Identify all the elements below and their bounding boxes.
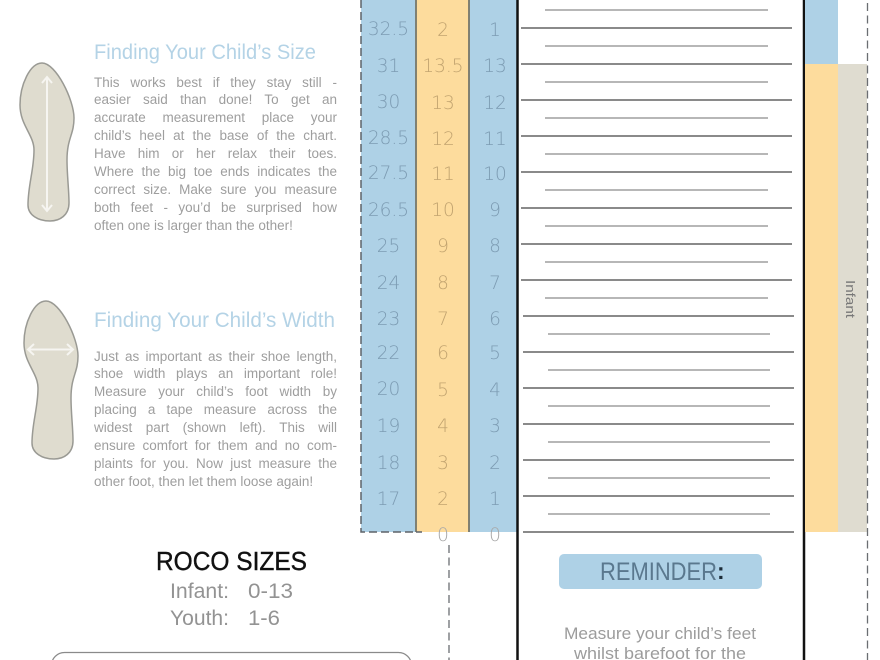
column: middle sizes: 13: [431, 93, 455, 114]
text block: finding size: both feet - you’d be surprised how: [94, 200, 337, 215]
column: middle sizes: [422, 0, 464, 546]
panel: size chart columns: [361, 0, 517, 532]
column: right sizes: 0: [489, 525, 501, 546]
column: right sizes: [483, 20, 507, 546]
text block: size ranges: [170, 579, 293, 630]
text block: finding width: other foot, then let them loose again!: [94, 474, 313, 489]
column: centimetre sizes: 24: [377, 273, 400, 294]
column: right sizes: 2: [489, 453, 501, 474]
callout: reminder: [559, 554, 762, 589]
text block: size ranges: Youth:: [170, 606, 229, 630]
column: middle sizes: 3: [437, 453, 449, 474]
column: centimetre sizes: 22: [377, 343, 400, 364]
text block: finding width: shoe width plays an important role!: [94, 366, 337, 381]
text block: finding width: plaints for you. Now just measure the: [94, 456, 337, 471]
bar: right blue: [805, 0, 838, 64]
column: centimetre sizes: 32.5: [368, 19, 409, 40]
heading: roco sizes: ROCO SIZES: [156, 546, 307, 576]
column: right sizes: 5: [489, 343, 501, 364]
text block: finding width: widest part (shown left). This will: [94, 420, 337, 435]
bar: infant grey: [838, 64, 867, 532]
column: right sizes: 9: [489, 200, 501, 221]
column: middle sizes: 13.5: [422, 56, 464, 77]
text block: finding size: correct size. Make sure you measure: [94, 182, 337, 197]
column: right sizes: 6: [489, 309, 501, 330]
column: centimetre sizes: 26.5: [368, 200, 409, 221]
chart: ruler lines: [521, 10, 794, 532]
column: middle sizes: 9: [437, 236, 449, 257]
text block: finding size: Have him or her relax their toes.: [94, 146, 337, 161]
text block: size ranges: 0-13: [248, 579, 293, 603]
bar: right yellow: [805, 64, 838, 532]
text block: finding width: Measure your child’s foot width by: [94, 384, 337, 399]
column: right sizes: 3: [489, 416, 501, 437]
column: middle sizes: 12: [431, 129, 455, 150]
column: centimetre sizes: [368, 19, 409, 510]
column: middle sizes: 6: [437, 343, 449, 364]
text block: finding size: Where the big toe ends indicates the: [94, 164, 337, 179]
column: centimetre sizes: 20: [377, 379, 400, 400]
column: right sizes: 7: [489, 273, 501, 294]
column: right sizes: 8: [489, 236, 501, 257]
column: middle sizes: 4: [437, 416, 449, 437]
column: right sizes: 12: [483, 93, 507, 114]
text block: finding width: placing a tape measure across the: [94, 402, 337, 417]
callout: reminder: REMINDER: [600, 558, 717, 586]
column: centimetre sizes: 25: [377, 236, 400, 257]
column: centimetre sizes: 17: [377, 489, 400, 510]
panel: bottom rounded box: [52, 652, 412, 660]
label: infant: Infant: [843, 280, 858, 318]
column: centimetre sizes: 31: [377, 56, 400, 77]
column: right sizes: 1: [489, 20, 501, 41]
column: middle sizes: 8: [437, 273, 449, 294]
column: centimetre sizes: 23: [377, 309, 400, 330]
text block: size ranges: Infant:: [170, 579, 229, 603]
dashed cut lines: [449, 3, 868, 660]
column: middle sizes: 0: [437, 525, 449, 546]
text block: finding size: often one is larger than the other!: [94, 218, 293, 233]
column: middle sizes: 2: [437, 489, 449, 510]
column: centimetre sizes: 28.5: [368, 128, 409, 149]
column: middle sizes: 5: [437, 380, 449, 401]
text block: reminder note: [564, 624, 756, 660]
panel: ruler frame: [518, 0, 804, 660]
text block: finding size: child’s heel at the base of the chart.: [94, 128, 337, 143]
column: right sizes: 13: [483, 56, 507, 77]
column: right sizes: 4: [489, 380, 501, 401]
column: centimetre sizes: 18: [377, 453, 400, 474]
text block: size ranges: 1-6: [248, 606, 280, 630]
column: centimetre sizes: 19: [377, 416, 400, 437]
text block: reminder note: Measure your child’s feet: [564, 624, 756, 643]
column: right sizes: 11: [483, 129, 507, 150]
icon: foot with width arrow: [24, 301, 78, 459]
text block: finding width: Just as important as their shoe length,: [94, 348, 337, 364]
column: middle sizes: 11: [431, 164, 455, 185]
heading: finding width: Finding Your Child’s Width: [94, 309, 335, 332]
column: centimetre sizes: 30: [377, 92, 400, 113]
text block: finding width: [94, 348, 337, 489]
icon: foot with length arrow: [20, 63, 74, 221]
text block: finding width: ensure comfort for them and no com-: [94, 438, 337, 453]
text block: finding size: [94, 74, 337, 233]
column: middle sizes: 2: [437, 20, 449, 41]
text block: finding size: easier said than done! To get an: [94, 92, 337, 107]
callout: reminder: :: [717, 558, 725, 584]
column: right sizes: 10: [483, 164, 507, 185]
column: middle sizes: 7: [437, 309, 449, 330]
column: right sizes: 1: [489, 489, 501, 510]
text block: finding size: This works best if they stay still -: [94, 74, 337, 90]
column: centimetre sizes: 27.5: [368, 163, 409, 184]
column: middle sizes: 10: [431, 200, 455, 221]
text block: finding size: accurate measurement place your: [94, 110, 337, 125]
heading: finding size: Finding Your Child’s Size: [94, 41, 316, 64]
